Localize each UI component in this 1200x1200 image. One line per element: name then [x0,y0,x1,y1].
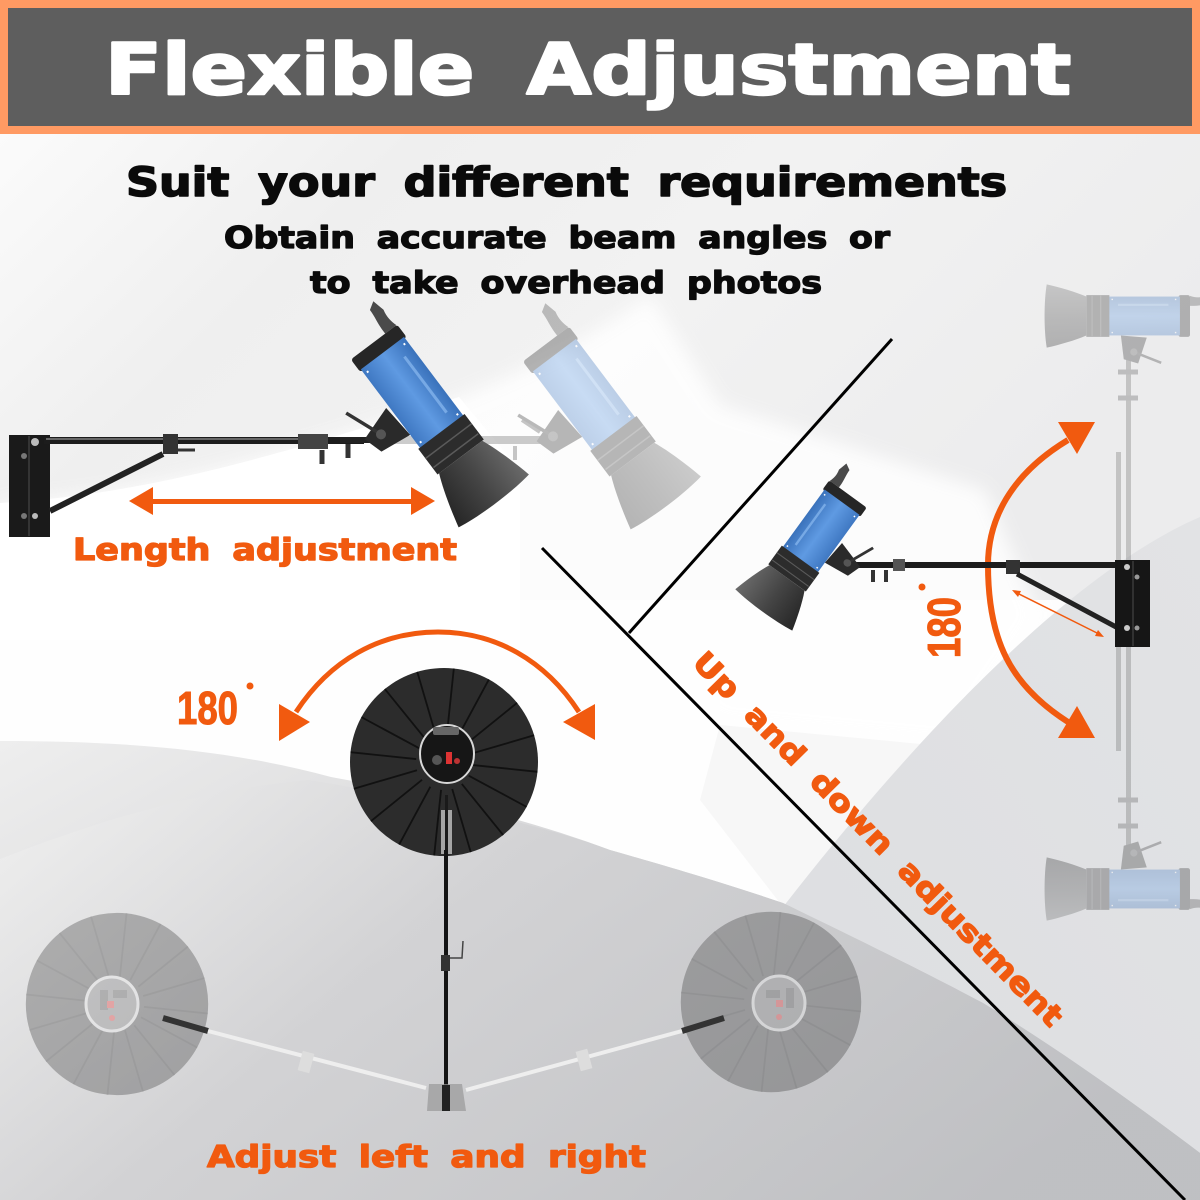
ghost vertical arm [1045,284,1200,921]
small strut arrow [1012,590,1104,637]
angle label: 180 [177,682,238,734]
caption: Length adjustment [73,533,457,568]
divider lines [542,339,1185,1200]
ghost lamp and extended arm [380,291,703,545]
length arrow [129,487,435,515]
header banner [0,0,1200,134]
angle label: 180 [918,597,970,658]
panel: length adjustment [9,289,703,568]
caption: Up and down adjustment [685,645,1070,1034]
lamp [734,454,905,643]
ghost left umbrella [17,904,426,1104]
description text: to take overhead photos [310,266,822,301]
wall arm [853,559,1150,647]
curved arrow [988,422,1095,738]
subheading: Suit your different requirements [126,160,1007,206]
wall bracket and arm [9,434,376,537]
panel: left and right adjustment [17,632,870,1175]
description text [224,221,890,301]
ghost right umbrella [466,903,870,1101]
curved arrow [279,632,595,741]
description text: Obtain accurate beam angles or [224,221,890,256]
caption: Adjust left and right [207,1140,646,1175]
centre umbrella on stand [341,659,547,1111]
lamp [301,289,531,543]
panel: up and down adjustment [685,284,1200,1034]
title: Flexible Adjustment [105,29,1071,111]
